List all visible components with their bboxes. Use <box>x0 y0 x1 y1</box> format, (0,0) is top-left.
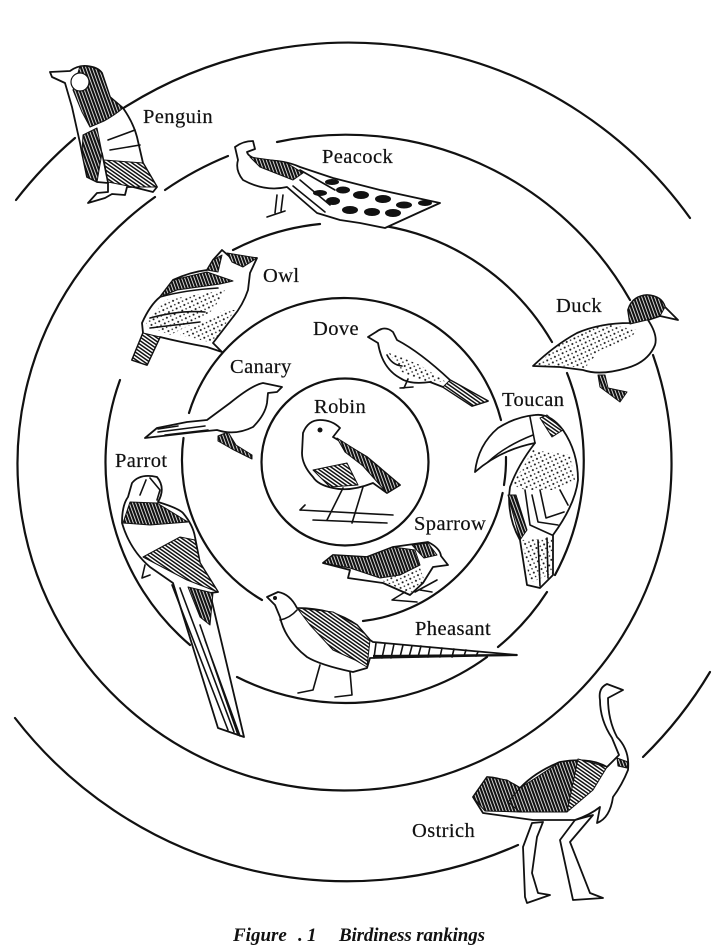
caption: . <box>298 925 303 946</box>
label: Dove: Dove <box>313 318 359 340</box>
caption: 1 <box>307 925 316 946</box>
bird: toucan <box>475 415 578 588</box>
label: Canary: Canary <box>230 356 292 378</box>
label: Ostrich: Ostrich <box>412 820 475 842</box>
bird: peacock <box>235 141 440 228</box>
bird: dove <box>368 328 488 406</box>
label: Toucan: Toucan <box>502 389 564 411</box>
ring 1: robin level <box>262 378 428 546</box>
bird: ostrich <box>473 684 628 903</box>
label: Peacock: Peacock <box>322 146 393 168</box>
label: Duck: Duck <box>556 295 602 317</box>
bird: parrot <box>122 476 244 737</box>
label: Sparrow: Sparrow <box>414 513 486 535</box>
bird: sparrow <box>323 542 448 602</box>
label: Owl: Owl <box>263 265 300 287</box>
bird: pheasant <box>267 592 517 697</box>
label: Penguin: Penguin <box>143 106 213 128</box>
bird: owl <box>132 250 257 365</box>
bird: duck <box>533 295 678 402</box>
ring 4: peacock, duck and parrot level <box>18 135 672 790</box>
bird: penguin <box>50 66 157 203</box>
label: Pheasant: Pheasant <box>415 618 491 640</box>
caption: Figure <box>232 925 287 946</box>
caption: Birdiness rankings <box>338 925 485 946</box>
label: Parrot: Parrot <box>115 450 168 472</box>
label: Robin: Robin <box>314 396 366 418</box>
bird: canary <box>145 383 282 459</box>
ring 2: dove, canary and sparrow level <box>182 298 506 621</box>
ring 3: owl, toucan and pheasant level <box>105 224 584 703</box>
bird: robin <box>300 420 400 523</box>
